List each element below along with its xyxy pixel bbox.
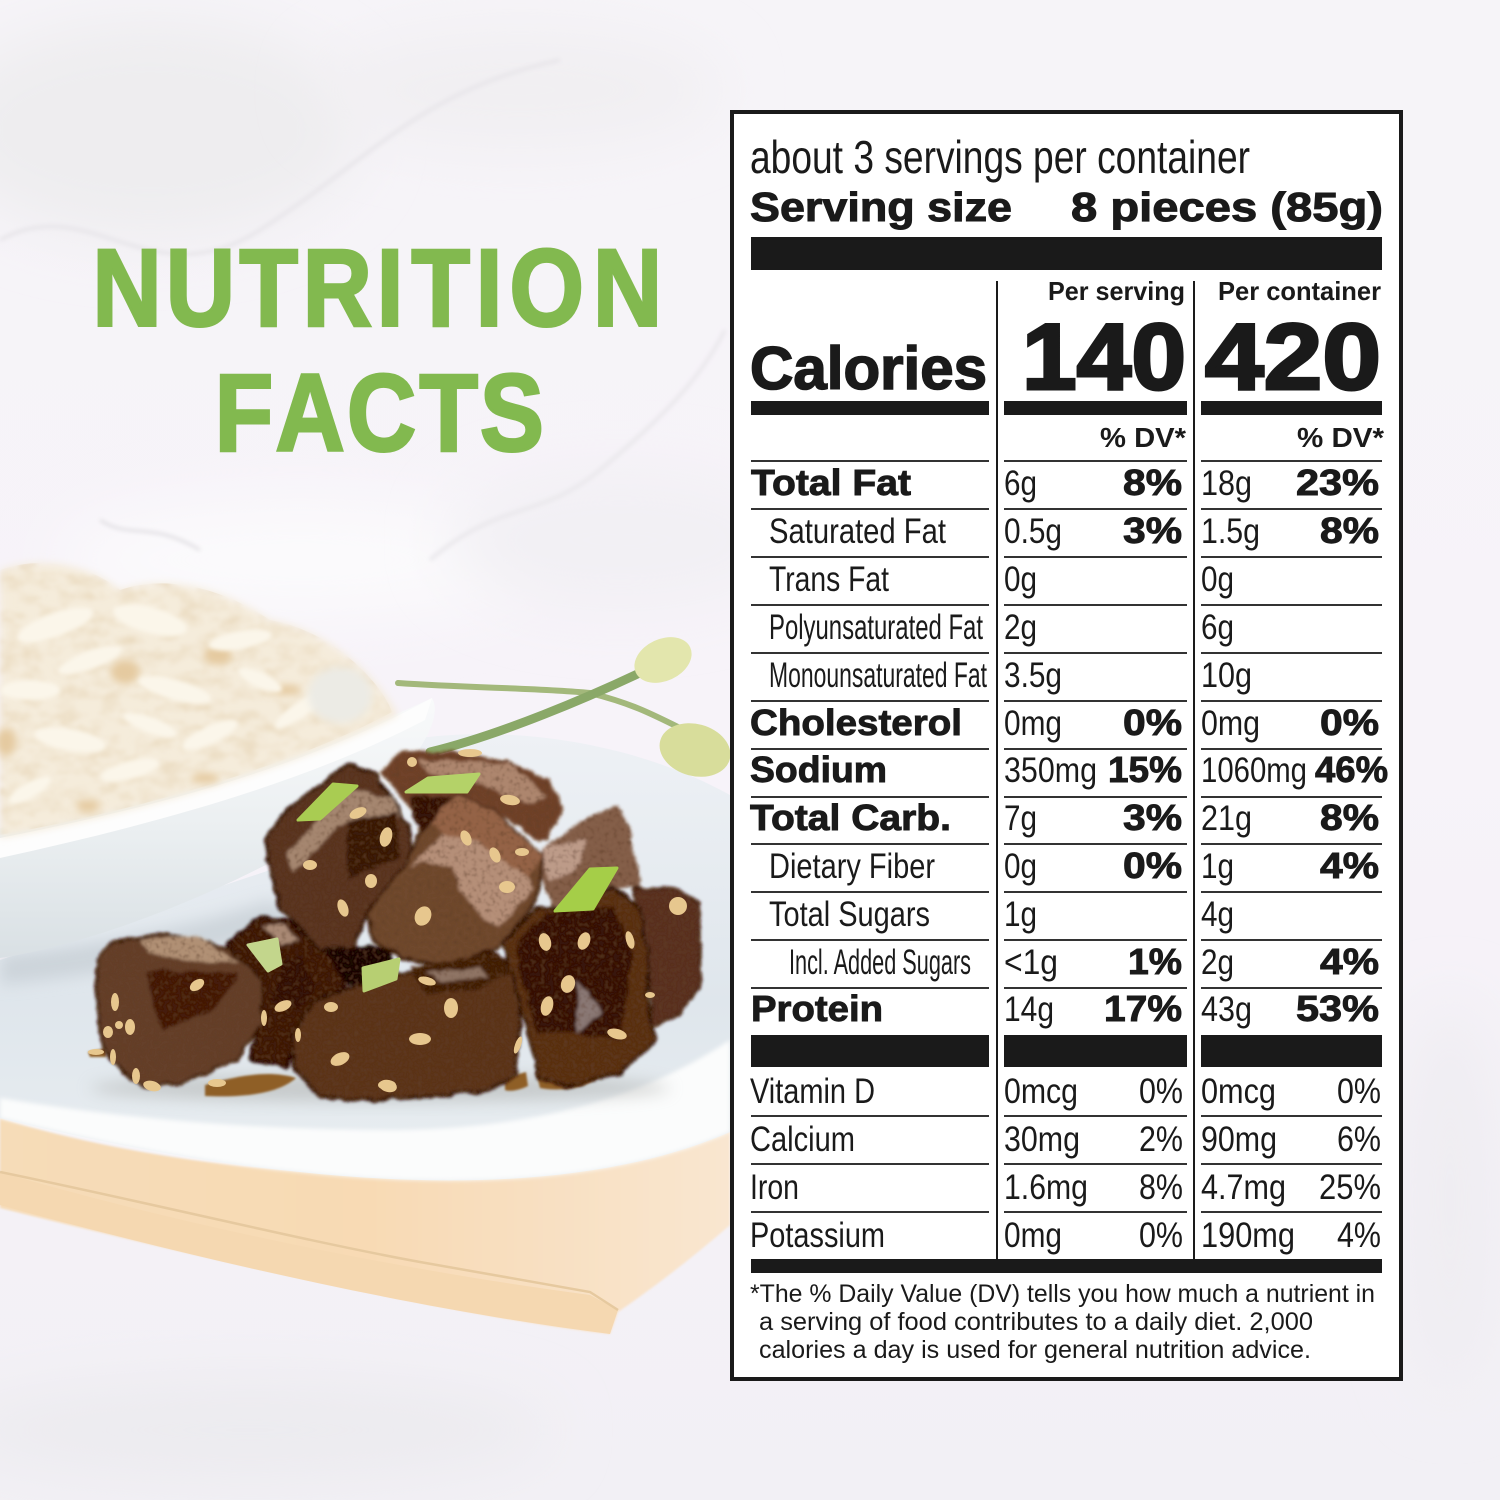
sauce: bottom middle chunk [410,953,517,993]
row: total sugars [769,895,1234,934]
row: vitamin D [750,1072,1381,1111]
row: sodium [750,749,1388,790]
row: potassium: 0% [1139,1216,1183,1255]
chunk: right back [542,807,640,910]
row: sodium: 15% [1108,749,1182,790]
row: sodium: 350mg [1004,751,1097,790]
scallion pieces [248,774,617,991]
row: cholesterol: Cholesterol [750,702,962,743]
row: protein: Protein [751,988,883,1029]
row: saturated fat: 3% [1123,510,1182,551]
row: calcium: 2% [1139,1120,1183,1159]
row: iron [750,1168,1381,1207]
row: sodium: 1060mg [1201,751,1307,790]
nutrition facts panel [732,112,1401,1379]
row: dietary fiber [769,845,1379,886]
thick section bars [751,1035,1382,1067]
row: dietary fiber: Dietary Fiber [769,847,935,886]
row: calcium: 30mg [1004,1120,1080,1159]
row: vitamin D: Vitamin D [750,1072,875,1111]
glaze: right back chunk [543,840,587,880]
row: trans fat [769,560,1234,599]
thick bar [751,237,1382,270]
row: potassium: 190mg [1201,1216,1295,1255]
row: saturated fat: Saturated Fat [769,512,946,551]
row: monounsaturated fat: Monounsaturated Fat [769,656,987,695]
row: trans fat: 0g [1004,560,1037,599]
row: total fat [751,462,1379,503]
row: total carb: 21g [1201,799,1252,838]
chunk: far right [633,888,700,1027]
glaze: left chunk [140,937,240,963]
row: iron: 25% [1319,1168,1381,1207]
footnote: *The % Daily Value (DV) tells you how much a nutrient in [750,1280,1375,1308]
row: total carb: 8% [1320,797,1379,838]
sauce: right front chunk [517,907,633,1040]
row: added sugars: Incl. Added Sugars [789,943,971,982]
row: total carb: 7g [1004,799,1037,838]
row: total fat: 6g [1004,464,1037,503]
row: protein: 43g [1201,990,1252,1029]
glaze: back top chunk [420,760,547,803]
percent DV headings [1100,422,1384,453]
row: dietary fiber: 0g [1004,847,1037,886]
chunk: left [97,935,263,1087]
chunk: back top [380,750,563,843]
row: protein: 14g [1004,990,1054,1029]
header: servings [750,131,1383,230]
footnote: calories a day is used for general nutrition advice. [759,1336,1311,1364]
row: calcium: 90mg [1201,1120,1277,1159]
row: dietary fiber: 0% [1123,845,1182,886]
column headings: Per container [1218,276,1381,306]
chunk: center [367,795,543,967]
row: protein: 53% [1296,988,1379,1029]
row: vitamin D: 0mcg [1201,1072,1276,1111]
row: potassium: Potassium [750,1216,885,1255]
row: vitamin D: 0mcg [1004,1072,1078,1111]
chunk: bottom middle [293,953,522,1100]
row: added sugars: 1% [1128,941,1182,982]
row: cholesterol [750,702,1379,743]
glaze: top left chunk [287,790,400,873]
row: added sugars: 2g [1201,943,1234,982]
row: calcium: 6% [1337,1120,1381,1159]
row: saturated fat: 8% [1320,510,1379,551]
row: added sugars [789,941,1379,982]
row: added sugars: <1g [1004,943,1058,982]
row: monounsaturated fat [769,656,1252,695]
row: trans fat: 0g [1201,560,1234,599]
row: total sugars: 1g [1004,895,1037,934]
row: monounsaturated fat: 3.5g [1004,656,1062,695]
row: trans fat: Trans Fat [769,560,889,599]
sauce: left chunk [147,970,240,1030]
column dividers [996,281,1195,1259]
row: total sugars: 4g [1201,895,1234,934]
bottom bar [751,1259,1382,1273]
calories: Calories [750,335,987,402]
row: cholesterol: 0mg [1201,704,1260,743]
row: vitamin D: 0% [1337,1072,1381,1111]
food photo: meat and rice on plate [0,563,737,1334]
meat chunks and glaze [97,750,700,1100]
row: iron: 8% [1139,1168,1183,1207]
row: cholesterol: 0% [1123,702,1182,743]
rice bowl [0,563,435,958]
scallion stems [398,628,737,784]
row: protein [751,988,1379,1029]
row: dietary fiber: 1g [1201,847,1234,886]
row: polyunsaturated fat: 6g [1201,608,1234,647]
row: polyunsaturated fat: Polyunsaturated Fat [769,608,983,647]
header: servings: about 3 servings per container [750,131,1250,183]
column headings: Per serving [1048,276,1185,306]
chunk: behind left [228,918,345,1067]
heading: Nutrition Facts: NUTRITION [92,226,662,349]
percent DV headings: % DV* [1100,422,1186,453]
footnote [750,1280,1375,1364]
sesame seeds [88,749,687,1094]
row: total sugars: Total Sugars [769,895,930,934]
row: dietary fiber: 4% [1320,845,1379,886]
row: saturated fat: 1.5g [1201,512,1260,551]
sauce shadow [90,1074,670,1102]
row: protein: 17% [1104,988,1182,1029]
row: potassium [750,1216,1381,1255]
row: iron: Iron [750,1168,799,1207]
chunk: right front [503,887,655,1087]
row: iron: 1.6mg [1004,1168,1088,1207]
heading: Nutrition Facts: FACTS [215,351,544,474]
header: servings: 8 pieces (85g) [1071,184,1383,230]
row: total carb: 3% [1123,797,1182,838]
row: iron: 4.7mg [1201,1168,1286,1207]
row: vitamin D: 0% [1139,1072,1183,1111]
row: total fat: 18g [1201,464,1252,503]
row: monounsaturated fat: 10g [1201,656,1252,695]
row: sodium: 46% [1315,749,1388,790]
row: sodium: Sodium [750,749,887,790]
row: total fat: 23% [1296,462,1379,503]
calories: 420 [1205,304,1381,409]
napkin [0,1118,730,1334]
calorie bars [751,401,1382,415]
row: total carb [750,797,1379,838]
row: cholesterol: 0mg [1004,704,1062,743]
row: cholesterol: 0% [1320,702,1379,743]
row: polyunsaturated fat [769,608,1234,647]
sauce pools [88,1048,602,1096]
heading: Nutrition Facts [92,226,662,474]
row: calcium [750,1120,1381,1159]
percent DV headings: % DV* [1297,422,1384,453]
row: calcium: Calcium [750,1120,855,1159]
row: potassium: 0mg [1004,1216,1062,1255]
row: potassium: 4% [1337,1216,1381,1255]
glaze: center chunk [427,795,543,877]
footnote: a serving of food contributes to a daily diet. 2,000 [759,1308,1313,1336]
plate [0,734,730,1180]
column headings [1048,276,1381,306]
dark gap [327,945,400,985]
row: polyunsaturated fat: 2g [1004,608,1037,647]
calories: 140 [1022,304,1186,409]
row: total fat: 8% [1123,462,1182,503]
row: saturated fat: 0.5g [1004,512,1062,551]
row: added sugars: 4% [1320,941,1379,982]
header: servings: Serving size [750,184,1012,230]
row: saturated fat [769,510,1379,551]
row: total carb: Total Carb. [750,797,951,838]
chunk: top left [265,765,410,950]
calories [750,304,1381,409]
row: total fat: Total Fat [751,462,911,503]
